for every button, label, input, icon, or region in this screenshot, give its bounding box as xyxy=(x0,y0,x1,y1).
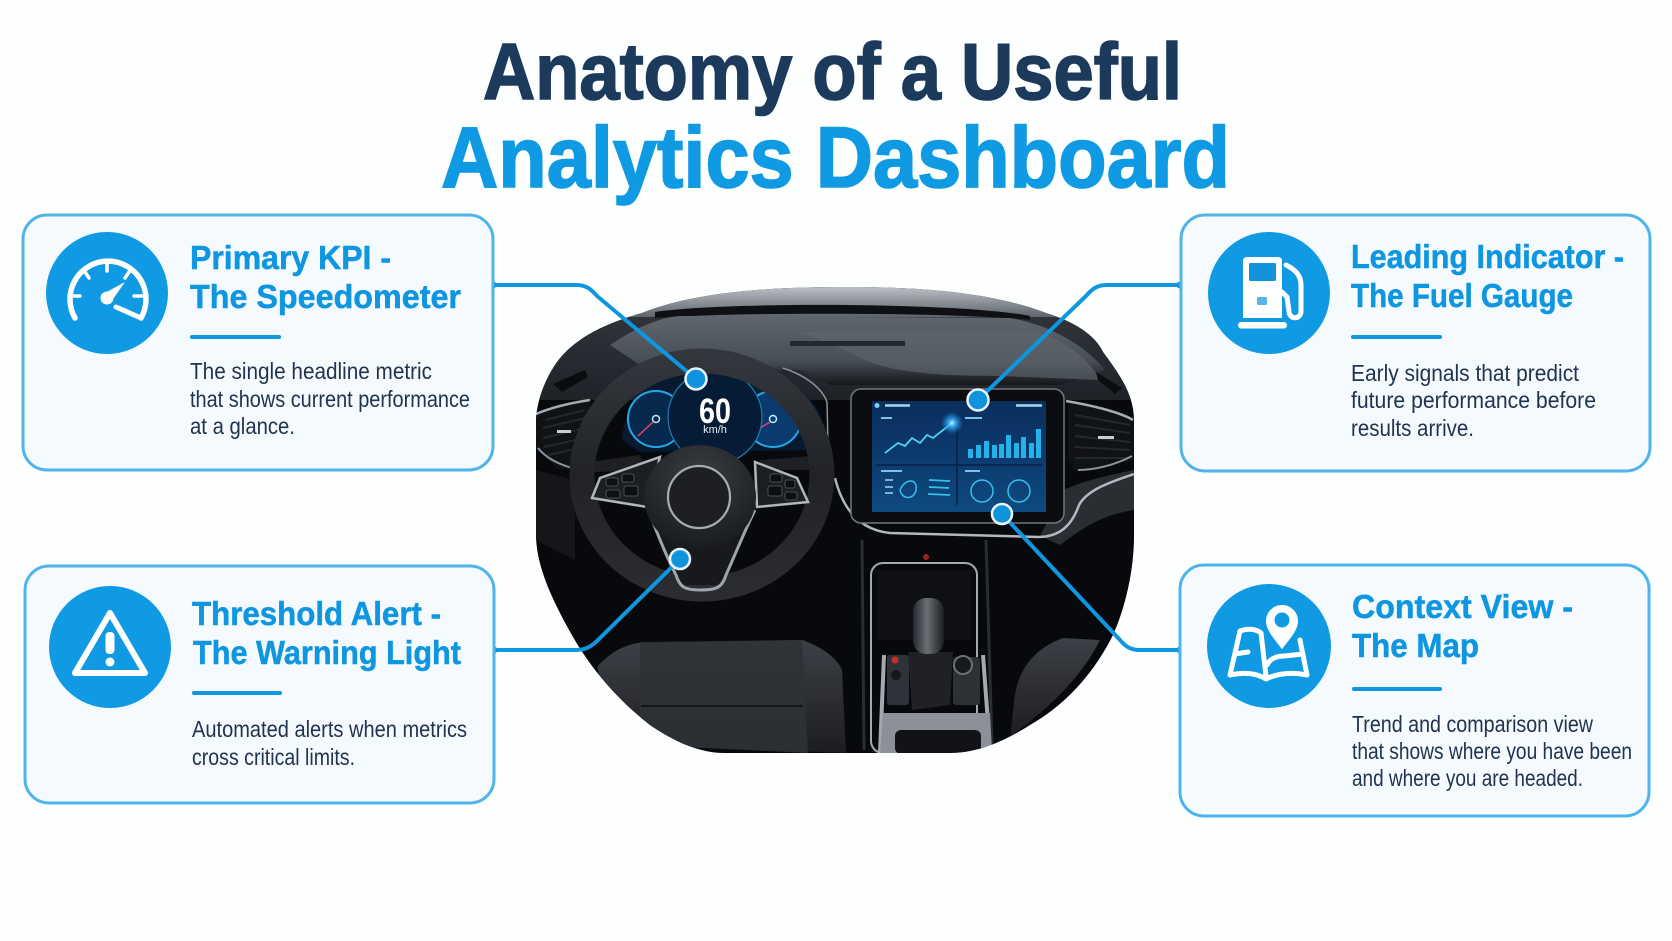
heading: The Warning Light xyxy=(193,634,461,671)
screen gauges xyxy=(885,480,1030,502)
connector: primary KPI to cluster xyxy=(490,282,706,390)
speed readout: 60 xyxy=(699,392,731,431)
description: Automated alerts when metrics xyxy=(192,716,467,742)
title: Analytics Dashboard xyxy=(441,110,1230,206)
heading: The Speedometer xyxy=(190,278,461,315)
heading: Context View - xyxy=(1352,588,1573,625)
title xyxy=(441,27,1230,206)
description: Early signals that predict xyxy=(1351,360,1580,386)
connector: context view to screen xyxy=(992,504,1184,654)
dash top surface xyxy=(610,316,1105,385)
description xyxy=(190,358,470,439)
touch screen frame and trim xyxy=(835,474,1134,537)
description: Trend and comparison view xyxy=(1352,711,1593,737)
description: future performance before xyxy=(1351,387,1596,413)
heading: Leading Indicator - xyxy=(1351,238,1624,275)
description: that shows current performance xyxy=(190,386,470,412)
panel: threshold alert xyxy=(25,566,494,803)
panel: context view xyxy=(1180,565,1649,816)
lower dash side panels xyxy=(1040,470,1134,545)
speed readout xyxy=(700,398,730,433)
description: cross critical limits. xyxy=(192,744,355,770)
description xyxy=(1352,711,1632,791)
icon: map with pin xyxy=(1207,584,1331,708)
heading xyxy=(1351,238,1624,314)
heading xyxy=(1352,588,1573,664)
upper side vents xyxy=(553,370,588,392)
description: The single headline metric xyxy=(190,358,432,384)
windshield edge xyxy=(629,287,1058,317)
icon: speedometer xyxy=(46,232,168,354)
heading: Primary KPI - xyxy=(190,239,391,276)
infotainment screen xyxy=(851,389,1064,523)
icon: fuel pump xyxy=(1208,232,1330,354)
heading: Threshold Alert - xyxy=(192,595,441,632)
title: Anatomy of a Useful xyxy=(483,27,1182,116)
right gauge xyxy=(756,392,800,448)
description xyxy=(1351,360,1596,441)
seats xyxy=(597,638,1100,753)
bar chart on screen xyxy=(968,429,1041,458)
heading xyxy=(190,239,461,315)
right air vent xyxy=(1066,401,1134,472)
panel: primary KPI xyxy=(23,215,493,470)
wheel buttons xyxy=(606,474,797,500)
description: at a glance. xyxy=(190,413,295,439)
shoulders of the dash xyxy=(530,300,1140,400)
panel: leading indicator xyxy=(1181,215,1650,471)
icon: warning triangle xyxy=(49,586,171,708)
center console xyxy=(862,540,992,754)
heading xyxy=(192,595,461,671)
connector: leading indicator to screen xyxy=(968,282,1184,410)
description xyxy=(192,716,467,770)
speed readout: km/h xyxy=(703,424,727,436)
instrument cluster xyxy=(622,368,828,464)
line chart on screen xyxy=(885,412,963,453)
steering wheel xyxy=(582,361,822,590)
description: and where you are headed. xyxy=(1352,765,1583,791)
left air vent xyxy=(536,400,590,470)
car dashboard illustration xyxy=(530,280,1140,760)
heading: The Map xyxy=(1352,627,1479,664)
connector: threshold alert to wheel xyxy=(490,549,690,654)
description: results arrive. xyxy=(1351,415,1474,441)
left gauge xyxy=(627,390,674,448)
heading: The Fuel Gauge xyxy=(1351,277,1573,314)
